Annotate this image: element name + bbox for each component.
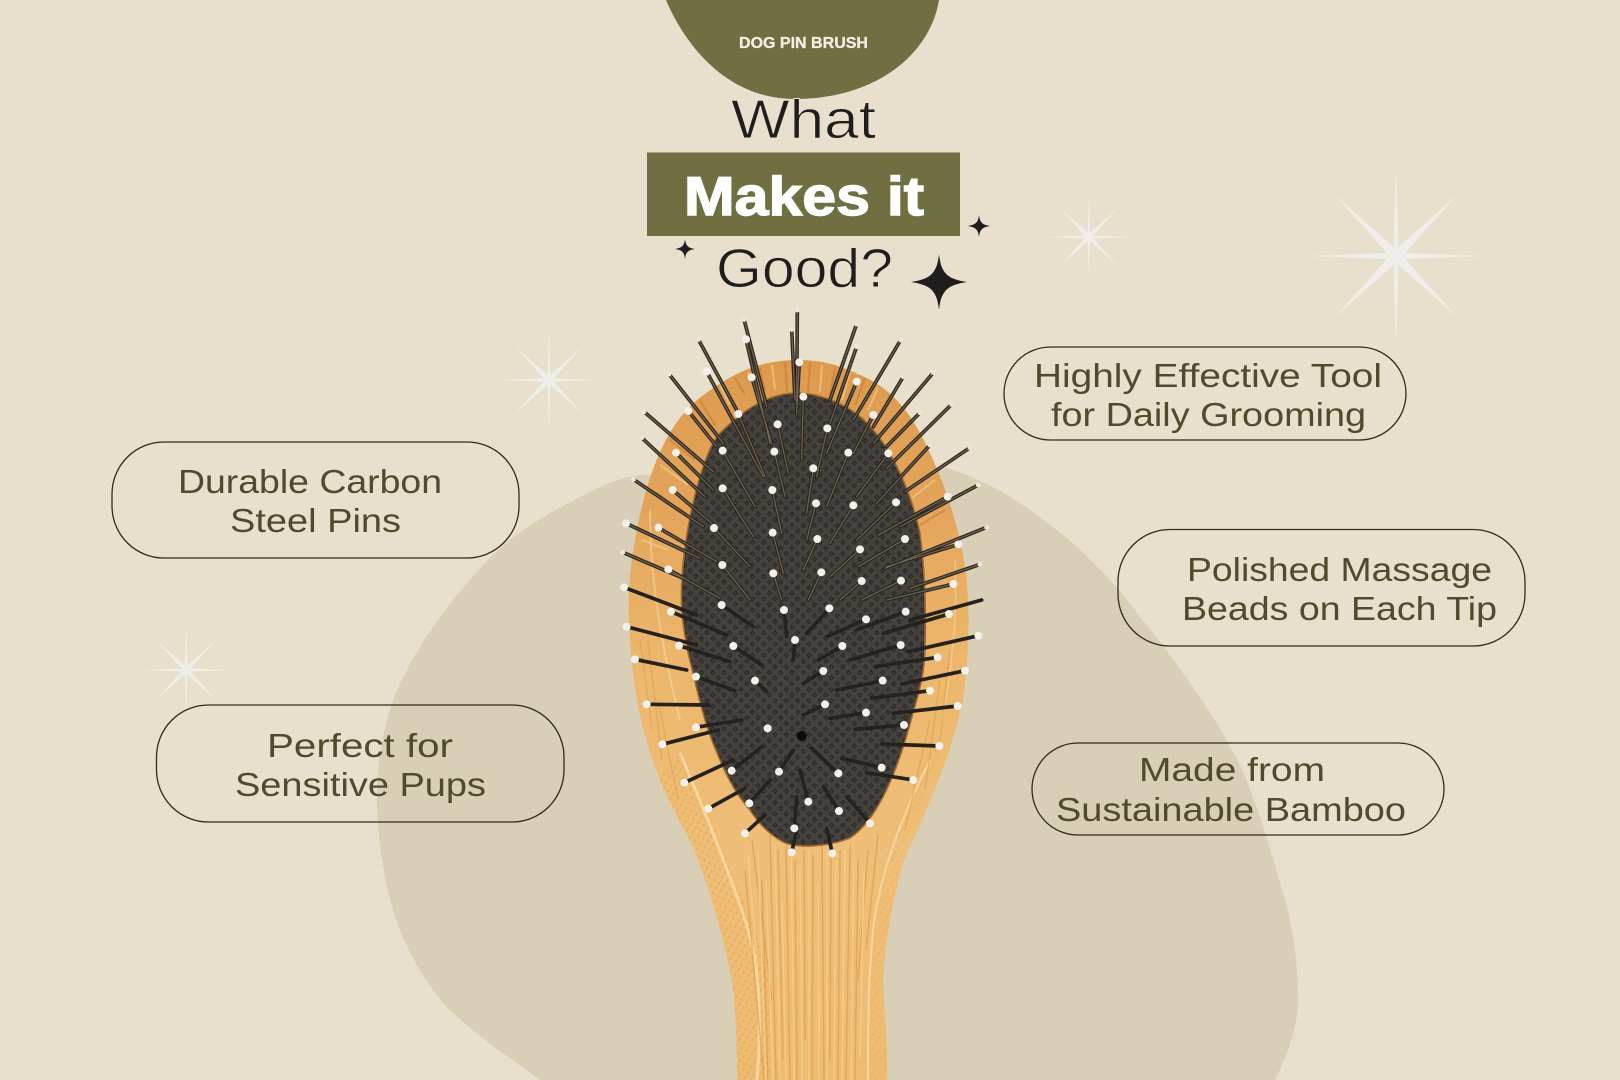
callout: Polished Massage Beads on Each Tip: Polished Massage: [1187, 551, 1492, 588]
icon: small dark sparkle left: [675, 239, 695, 259]
callout: Highly Effective Tool for Daily Grooming: [1004, 347, 1406, 440]
rubber pin pad: [681, 393, 925, 846]
title line: What: What: [731, 88, 876, 150]
callout: Perfect for Sensitive Pups: Perfect for: [267, 727, 453, 764]
brush illustration: [623, 310, 987, 1080]
callout: Made from Sustainable Bamboo: Made from: [1139, 751, 1325, 788]
callout: Perfect for Sensitive Pups: [156, 705, 564, 822]
title highlight: Makes it: [647, 152, 960, 236]
title highlight: Makes it: Makes it: [684, 165, 924, 227]
lower pins: [624, 587, 982, 853]
callout: Highly Effective Tool for Daily Grooming: Highly Effective Tool: [1034, 357, 1382, 394]
callout: Perfect for Sensitive Pups: Sensitive Pups: [235, 766, 486, 803]
callout: Polished Massage Beads on Each Tip: [1118, 530, 1525, 646]
icon: small dark sparkle right: [968, 215, 990, 237]
icon: large white star: [1308, 168, 1484, 344]
callout: Made from Sustainable Bamboo: [1032, 743, 1444, 835]
callout: Durable Carbon Steel Pins: Durable Carbon: [178, 463, 442, 500]
icon: white star left: [500, 331, 598, 429]
top olive badge: [666, 0, 939, 99]
centre hole: [797, 731, 807, 741]
title: [647, 88, 960, 299]
upper pins: [623, 310, 987, 600]
bamboo grain: [640, 362, 956, 1080]
callout: Durable Carbon Steel Pins: [112, 442, 519, 558]
callout: Made from Sustainable Bamboo: Sustainable Bamboo: [1056, 791, 1406, 828]
brush wooden body: [629, 360, 969, 1080]
badge label: DOG PIN BRUSH: [739, 35, 868, 52]
title line: Good?: Good?: [716, 237, 893, 299]
icon: large dark sparkle: [911, 254, 967, 310]
callout: Polished Massage Beads on Each Tip: Beads on Each Tip: [1182, 590, 1497, 627]
pins: [623, 310, 987, 853]
icon: white star lower left: [142, 626, 230, 714]
icon: white star top centre: [1047, 195, 1131, 279]
callout: Highly Effective Tool for Daily Grooming: for Daily Grooming: [1051, 396, 1366, 433]
callout: Durable Carbon Steel Pins: Steel Pins: [230, 502, 401, 539]
background blob: [377, 468, 1298, 1080]
